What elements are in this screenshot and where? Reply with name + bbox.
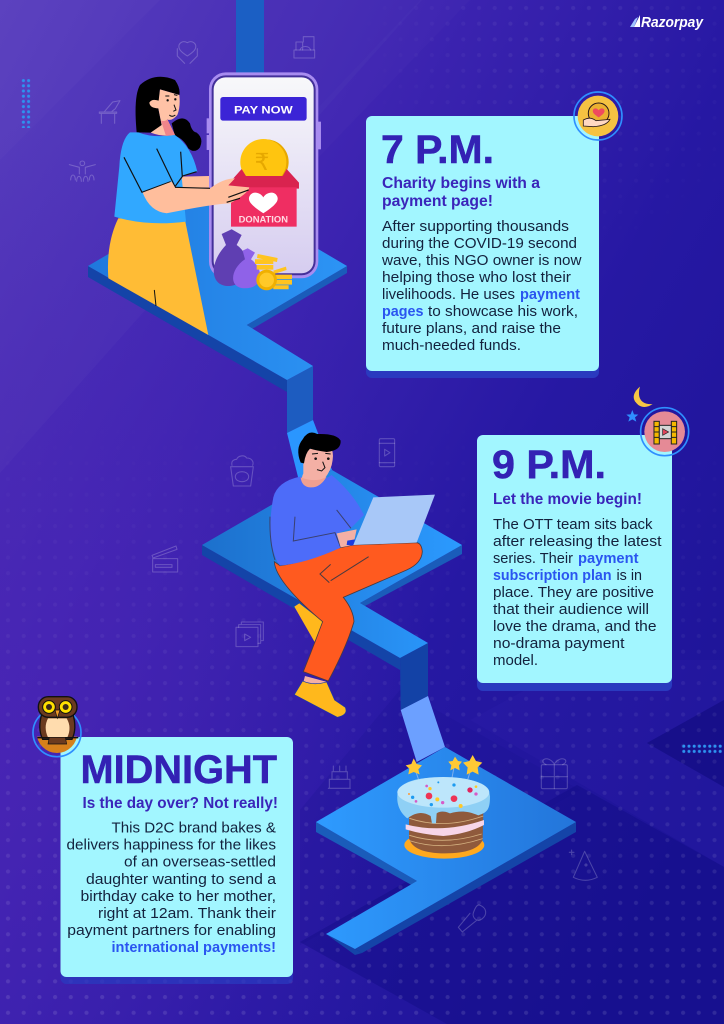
platform: midnight level <box>316 747 576 955</box>
facial features <box>165 95 177 116</box>
icon: gift box <box>541 759 567 789</box>
body text: subscription plan <box>493 568 612 584</box>
front shoe <box>294 681 346 717</box>
body text: to showcase his work, <box>428 304 578 320</box>
logo: Razorpay: Razorpay <box>641 15 704 31</box>
icon: microphone <box>458 905 486 932</box>
sweater lines <box>270 510 351 560</box>
shirt seams <box>124 149 197 192</box>
head <box>302 446 333 487</box>
neck shadow <box>161 119 175 136</box>
path: link to cake level <box>401 696 445 762</box>
illustration: phone with donation box <box>207 72 321 290</box>
body text: livelihoods. He uses <box>382 287 515 303</box>
body text <box>381 219 582 354</box>
rupee coin: ₹ <box>255 149 269 175</box>
cake cream layer <box>406 820 484 836</box>
money bags and coins <box>214 229 292 290</box>
skirt seam <box>154 290 156 306</box>
illustration: woman holding donation box <box>108 77 249 335</box>
body text: of an overseas-settled <box>124 855 276 871</box>
icon: community leader <box>69 161 95 181</box>
panel: 9 P.M. <box>477 435 672 691</box>
platform: movie level <box>202 470 462 710</box>
icon: birthday cake outline <box>328 766 350 788</box>
panel: midnight <box>60 737 293 984</box>
body text: series. Their <box>493 551 573 567</box>
sweater <box>270 475 364 566</box>
platform: charity level <box>88 190 347 433</box>
icon: video stack <box>236 622 263 647</box>
body text: love the drama, and the <box>493 619 656 635</box>
face and neck <box>149 89 180 136</box>
rupee coin <box>240 139 289 176</box>
icon: clapperboard <box>152 546 178 572</box>
icon: party hat <box>569 850 597 880</box>
body text: that their audience will <box>493 602 649 618</box>
illustration: man working on laptop <box>270 433 435 717</box>
icon: gift basket <box>294 37 315 58</box>
body text: after releasing the latest <box>493 534 662 550</box>
heading: 9 P.M.: 9 P.M. <box>492 443 606 487</box>
body text: future plans, and raise the <box>382 321 561 337</box>
body text: daughter wanting to send a <box>86 872 277 888</box>
icon: phone video <box>379 439 395 467</box>
frosting top <box>397 777 489 808</box>
pants <box>274 543 422 681</box>
cake plate <box>404 831 484 859</box>
laptop <box>347 495 435 546</box>
skirt <box>108 218 208 335</box>
neck shadow <box>301 477 327 487</box>
star toppers <box>406 755 482 796</box>
path: top connector <box>236 0 264 80</box>
back arm <box>179 176 209 188</box>
shirt <box>114 132 197 223</box>
body text: wave, this NGO owner is now <box>381 253 582 269</box>
man's face features <box>312 453 331 471</box>
body text: during the COVID-19 second <box>382 236 577 252</box>
front arm and hand <box>143 178 249 213</box>
subheading: Let the movie begin! <box>493 491 642 508</box>
body text: The OTT team sits back <box>493 517 653 533</box>
cake stripes <box>409 816 483 846</box>
body text: international payments! <box>112 940 276 956</box>
pants fold lines <box>320 557 369 583</box>
body text: delivers happiness for the likes <box>66 838 276 854</box>
man's hair <box>298 433 341 463</box>
body text: model. <box>493 653 538 669</box>
subheading: Charity begins with a <box>382 175 540 192</box>
body text <box>493 517 662 669</box>
icon badge: film with moon and star <box>626 387 689 456</box>
pay now button: PAY NOW <box>234 105 293 117</box>
moon <box>634 387 653 407</box>
panel: 7 P.M. <box>366 116 599 378</box>
body text: pages <box>382 304 424 320</box>
sprinkles <box>408 781 478 808</box>
heading: 7 P.M.: 7 P.M. <box>381 128 494 172</box>
pay now button <box>220 97 307 121</box>
body text: no-drama payment <box>493 636 624 652</box>
frosting <box>397 777 490 823</box>
body text: After supporting thousands <box>382 219 569 235</box>
cake sponge <box>409 812 483 853</box>
icon: popcorn <box>231 456 253 486</box>
donation box <box>228 169 299 227</box>
body text: much-needed funds. <box>382 338 521 354</box>
hand <box>337 529 357 547</box>
icon: voting hand <box>99 101 120 123</box>
body text: right at 12am. Thank their <box>98 906 276 922</box>
icon badge: owl <box>33 697 81 757</box>
star <box>626 410 638 422</box>
body text: payment partners for enabling <box>67 923 276 939</box>
body text: place. They are positive <box>493 585 654 601</box>
film strip <box>654 421 677 444</box>
body text: This D2C brand bakes & <box>112 821 276 837</box>
body text <box>66 821 277 956</box>
subheading: payment page! <box>382 193 493 210</box>
icon badge: heart in hand <box>574 92 622 140</box>
back shoe <box>294 603 323 643</box>
body text: birthday cake to her mother, <box>80 889 276 905</box>
body text: payment <box>578 551 639 567</box>
hair <box>136 77 180 133</box>
donation box: DONATION <box>239 215 288 225</box>
body text: helping those who lost their <box>382 270 571 286</box>
ankle <box>303 676 326 687</box>
icon: caring hands <box>177 42 197 63</box>
subheading <box>382 175 540 210</box>
heading: midnight: MIDNIGHT <box>80 748 277 792</box>
subheading: Is the day over? Not really! <box>82 795 278 812</box>
hair curl <box>172 118 201 151</box>
path: link between first and second levels <box>287 420 332 485</box>
body text: payment <box>520 287 580 303</box>
body text: is in <box>616 568 642 584</box>
phone body <box>207 72 321 278</box>
illustration: birthday cake <box>397 755 490 859</box>
